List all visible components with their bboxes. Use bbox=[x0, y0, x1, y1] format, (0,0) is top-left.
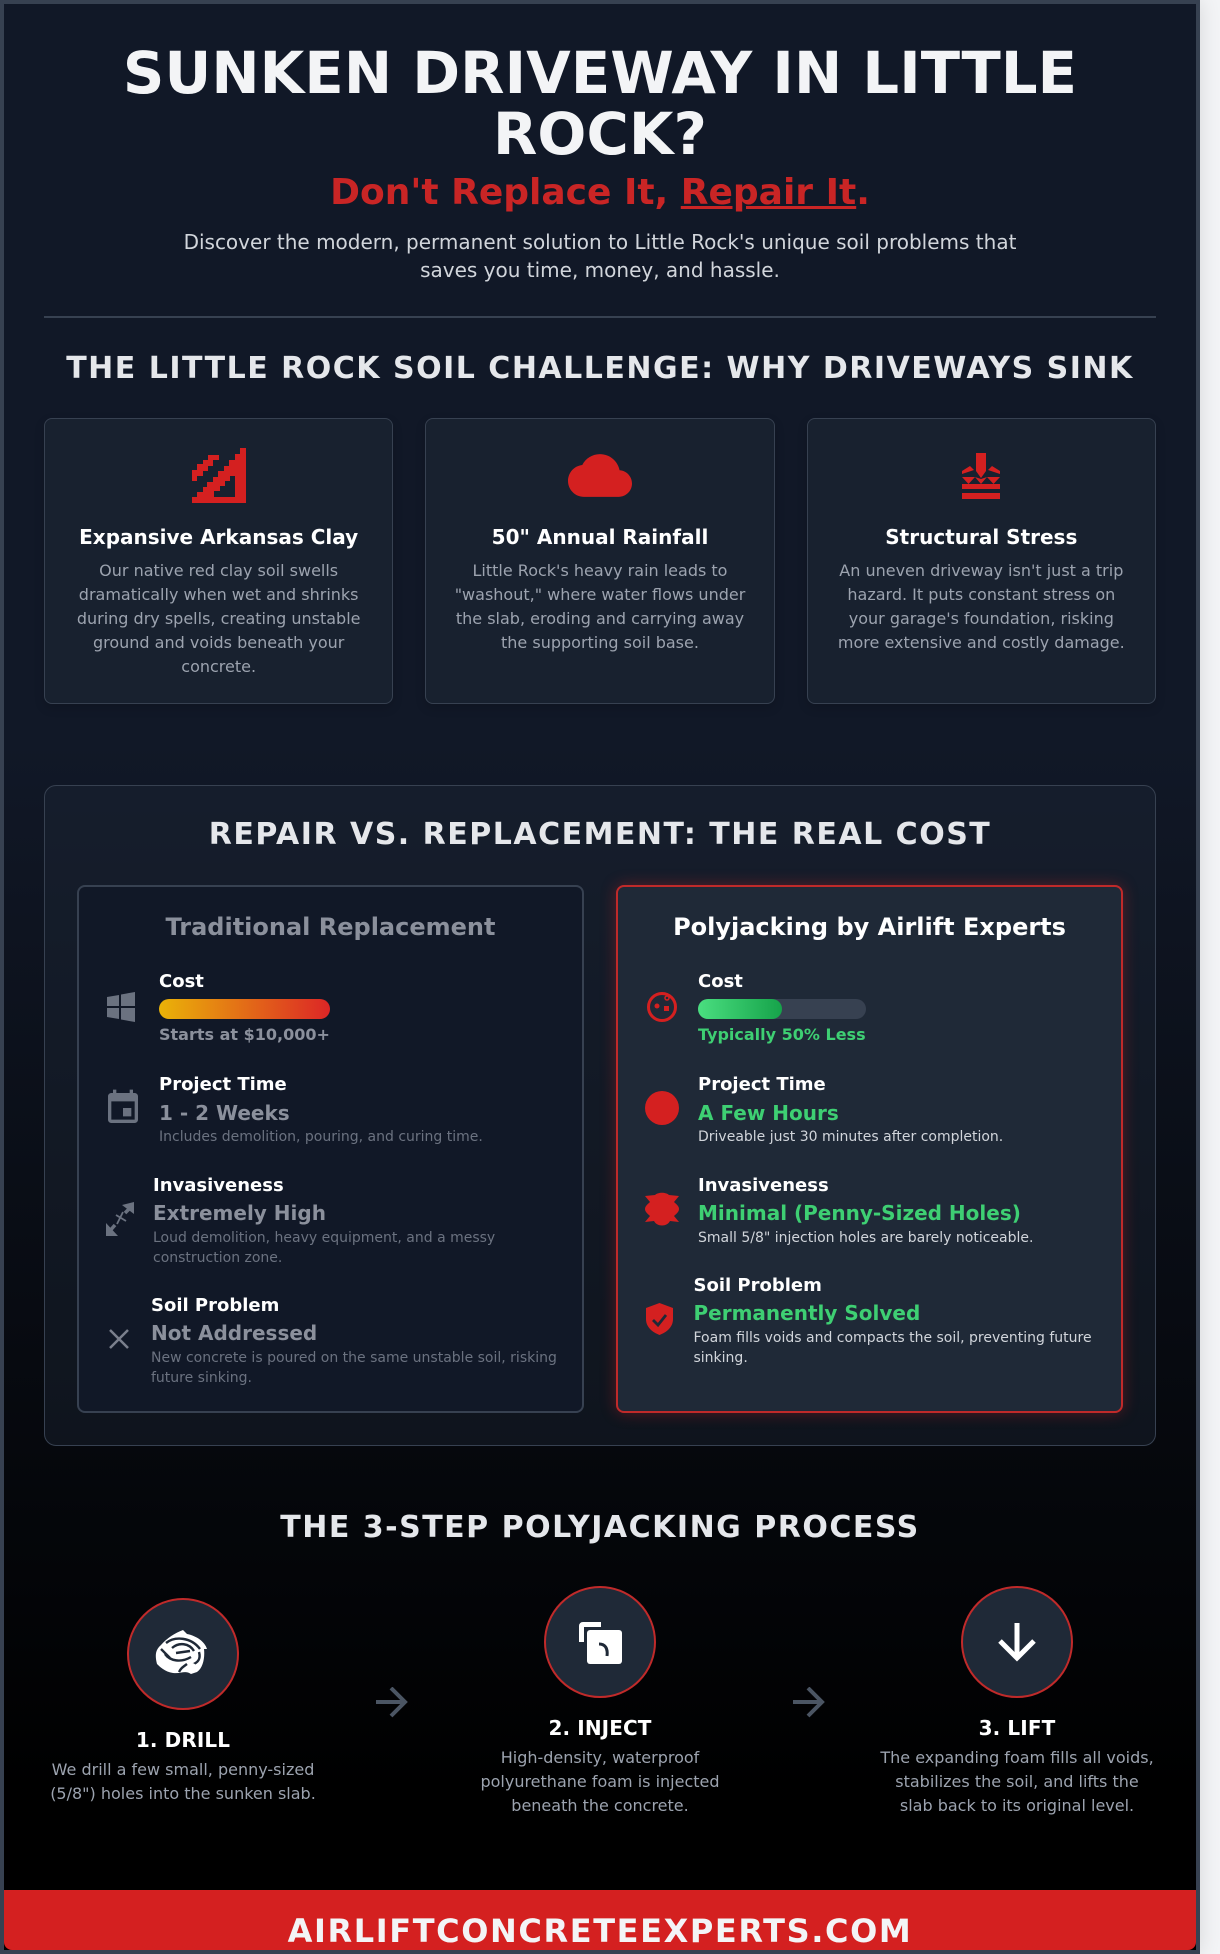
row: soil problem bbox=[109, 1295, 557, 1386]
value: Extremely High bbox=[153, 1201, 326, 1225]
step title: 2. INJECT bbox=[548, 1716, 651, 1740]
website: AIRLIFTCONCRETEEXPERTS.COM bbox=[288, 1912, 912, 1950]
icon circle: lift bbox=[961, 1586, 1073, 1698]
arrow: step 1 to 2 bbox=[376, 1687, 408, 1718]
header bbox=[44, 40, 1156, 318]
card text bbox=[838, 561, 1125, 652]
card text: the slab, eroding and carrying away bbox=[456, 609, 744, 628]
footer banner bbox=[4, 1890, 1196, 1950]
bar fill bbox=[698, 999, 782, 1019]
label: Soil Problem bbox=[694, 1275, 822, 1296]
step title: 3. LIFT bbox=[979, 1716, 1055, 1740]
label: Invasiveness bbox=[153, 1175, 284, 1196]
row: soil problem bbox=[646, 1275, 1092, 1366]
panel: expansive clay bbox=[44, 418, 393, 704]
description: Includes demolition, pouring, and curing time. bbox=[159, 1129, 483, 1145]
description bbox=[151, 1350, 557, 1386]
step text: The expanding foam fills all voids, bbox=[880, 1748, 1154, 1767]
description: sinking. bbox=[694, 1350, 748, 1366]
intro paragraph: saves you time, money, and hassle. bbox=[420, 258, 780, 282]
step text bbox=[880, 1748, 1154, 1815]
row: cost bbox=[647, 971, 866, 1044]
icon: calendar bbox=[108, 1090, 138, 1123]
heading: real cost: REPAIR VS. REPLACEMENT: THE REAL COST bbox=[209, 817, 991, 852]
card text: Little Rock's heavy rain leads to bbox=[473, 561, 727, 580]
card text bbox=[77, 561, 360, 676]
panel: polyjacking bbox=[616, 885, 1123, 1413]
cost note: Typically 50% Less bbox=[698, 1025, 866, 1044]
step text: polyurethane foam is injected bbox=[480, 1772, 720, 1791]
value: A Few Hours bbox=[698, 1101, 839, 1125]
icon circle: inject bbox=[544, 1586, 656, 1698]
step text: stabilizes the soil, and lifts the bbox=[895, 1772, 1139, 1791]
card title: 50" Annual Rainfall bbox=[492, 525, 708, 549]
step text: High-density, waterproof bbox=[501, 1748, 699, 1767]
value: 1 - 2 Weeks bbox=[159, 1101, 290, 1125]
step 2: inject bbox=[480, 1586, 720, 1815]
description: Foam fills voids and compacts the soil, preventing future bbox=[694, 1330, 1092, 1346]
arrow: step 2 to 3 bbox=[793, 1687, 825, 1718]
icon: clay soil bbox=[192, 448, 246, 503]
column title: Traditional Replacement bbox=[166, 913, 495, 941]
description: Small 5/8" injection holes are barely noticeable. bbox=[698, 1230, 1033, 1246]
card text: ground and voids beneath your bbox=[93, 633, 344, 652]
heading: process: THE 3-STEP POLYJACKING PROCESS bbox=[280, 1510, 920, 1545]
value: Not Addressed bbox=[151, 1321, 317, 1345]
row: cost bbox=[107, 971, 330, 1044]
step text: (5/8") holes into the sunken slab. bbox=[50, 1784, 316, 1803]
value: Permanently Solved bbox=[694, 1301, 920, 1325]
intro paragraph: Discover the modern, permanent solution to Little Rock's unique soil problems that bbox=[184, 230, 1016, 254]
step 1: drill bbox=[50, 1598, 316, 1803]
title: ROCK? bbox=[493, 100, 707, 168]
row: project time bbox=[108, 1074, 483, 1145]
icon: shield check bbox=[646, 1303, 673, 1335]
card text: "washout," where water flows under bbox=[455, 585, 745, 604]
label: Cost bbox=[159, 971, 204, 992]
icon: coin bbox=[647, 992, 677, 1022]
label: Soil Problem bbox=[151, 1295, 279, 1316]
icon circle: drill bbox=[127, 1598, 239, 1710]
description bbox=[153, 1230, 495, 1266]
panel: repair vs replacement bbox=[44, 785, 1156, 1446]
card text: the supporting soil base. bbox=[501, 633, 699, 652]
step text: beneath the concrete. bbox=[511, 1796, 689, 1815]
icon: windows bbox=[107, 992, 135, 1022]
icon: cross bbox=[109, 1329, 129, 1349]
icon: cloud bbox=[568, 454, 632, 497]
description bbox=[694, 1330, 1092, 1366]
row: invasiveness bbox=[645, 1175, 1033, 1246]
icon: stress arrow bbox=[962, 453, 1000, 499]
description: New concrete is poured on the same unstable soil, risking bbox=[151, 1350, 557, 1366]
card text: more extensive and costly damage. bbox=[838, 633, 1125, 652]
step text bbox=[480, 1748, 720, 1815]
card text: dramatically when wet and shrinks bbox=[79, 585, 359, 604]
icon: bug bbox=[645, 1192, 679, 1226]
cost note: Starts at $10,000+ bbox=[159, 1025, 330, 1044]
label: Cost bbox=[698, 971, 743, 992]
card text: Our native red clay soil swells bbox=[99, 561, 338, 580]
step text: We drill a few small, penny-sized bbox=[52, 1760, 314, 1779]
card text: An uneven driveway isn't just a trip bbox=[839, 561, 1123, 580]
panel: annual rainfall bbox=[425, 418, 775, 704]
card text: concrete. bbox=[181, 657, 256, 676]
card text: during dry spells, creating unstable bbox=[77, 609, 360, 628]
card text: hazard. It puts constant stress on bbox=[847, 585, 1115, 604]
row: project time bbox=[645, 1074, 1003, 1145]
column title: Polyjacking by Airlift Experts bbox=[673, 913, 1066, 941]
intro paragraph bbox=[184, 230, 1016, 282]
subtitle: Don't Replace It, Repair It. bbox=[330, 172, 870, 213]
description: Loud demolition, heavy equipment, and a messy bbox=[153, 1230, 495, 1246]
cost bar bbox=[159, 999, 330, 1019]
step 3: lift bbox=[880, 1586, 1154, 1815]
step text bbox=[50, 1760, 316, 1803]
description: future sinking. bbox=[151, 1370, 252, 1386]
label: Project Time bbox=[698, 1074, 826, 1095]
icon: expand arrows bbox=[106, 1202, 134, 1236]
title bbox=[123, 40, 1077, 168]
description: Driveable just 30 minutes after completion. bbox=[698, 1129, 1003, 1145]
step title: 1. DRILL bbox=[136, 1728, 230, 1752]
value: Minimal (Penny-Sized Holes) bbox=[698, 1201, 1021, 1225]
icon: red circle bbox=[645, 1091, 679, 1125]
card text bbox=[455, 561, 746, 652]
card title: Expansive Arkansas Clay bbox=[79, 525, 358, 549]
cost bar bbox=[698, 999, 866, 1019]
card title: Structural Stress bbox=[885, 525, 1077, 549]
heading: soil challenge: THE LITTLE ROCK SOIL CHALLENGE: WHY DRIVEWAYS SINK bbox=[66, 351, 1134, 386]
card text: your garage's foundation, risking bbox=[849, 609, 1114, 628]
step text: slab back to its original level. bbox=[900, 1796, 1134, 1815]
panel: structural stress bbox=[807, 418, 1156, 704]
label: Project Time bbox=[159, 1074, 287, 1095]
row: invasiveness bbox=[106, 1175, 495, 1266]
title: SUNKEN DRIVEWAY IN LITTLE bbox=[123, 40, 1077, 107]
label: Invasiveness bbox=[698, 1175, 829, 1196]
panel: traditional replacement bbox=[77, 885, 584, 1413]
section: 3-step process bbox=[50, 1510, 1154, 1815]
description: construction zone. bbox=[153, 1250, 282, 1266]
